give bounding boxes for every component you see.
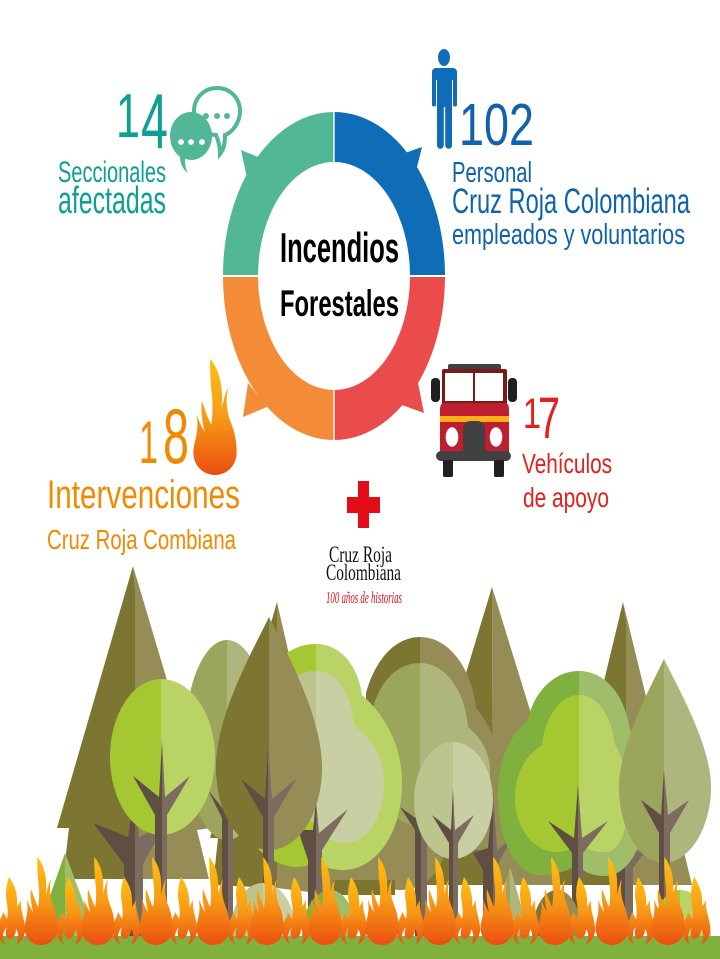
bush: bright green [652,890,711,936]
bush: pale [230,883,296,936]
tree: green ellipse left [110,679,215,835]
ring segment: orange [223,277,333,440]
number 14: 4 [141,77,168,165]
tree: rounded olive [185,640,269,840]
number 14 [116,77,168,165]
stat: 102 personal [452,92,690,251]
icon: chat bubbles [170,88,240,173]
icon: person [432,49,457,149]
ground [0,936,720,959]
label: Cruz Roja Combiana: Cruz Roja Combiana [47,524,236,555]
tree: rounded dark olive with lighter crown [366,637,500,850]
tree: large conifer left [57,566,211,879]
ring segment: blue [335,112,445,275]
label: Intervenciones: Intervenciones [47,473,240,517]
label: afectadas: afectadas [58,180,166,222]
logo text line 2: Colombiana [326,560,401,585]
title: Incendios: Incendios [280,224,399,271]
trunk: bright green tree [298,800,348,936]
stat: 18 intervenciones [47,392,240,555]
trunk: teardrop right [641,770,689,936]
label: Personal: Personal [452,157,532,189]
forest illustration [0,566,720,959]
trunk: large teardrop [241,747,296,936]
tree: green cloud right [498,671,648,876]
trunk: centre conifer [473,790,512,936]
ring segment: red [335,277,445,440]
ring segment: teal [223,112,333,275]
number 17: 1 [523,390,541,438]
icon: fire truck [431,364,517,477]
logo tagline: 100 años de historias [326,588,402,607]
number 102: 102 [459,92,534,158]
number 14: 1 [116,82,140,151]
number 17 [523,386,560,451]
number 17: 7 [538,386,560,451]
logo text line 1: Cruz Roja [329,542,392,567]
tree: large teardrop [216,617,322,850]
stat: 14 seccionales afectadas [58,77,168,222]
trunk: dark olive tree [400,807,427,936]
title: Forestales: Forestales [280,283,399,324]
tree: back conifer centre [355,587,584,890]
tree: small conifer behind [210,602,395,895]
stat: 17 vehiculos [522,386,612,513]
trunk: large conifer [93,790,165,936]
trunk: green cloud right [548,784,608,936]
small conifer front right [490,867,530,936]
label: Seccionales: Seccionales [58,156,166,189]
small conifer front left [36,853,96,936]
trunk: green ellipse left [133,740,190,936]
number 18 [139,392,189,480]
bush: green [302,890,356,936]
label: de apoyo: de apoyo [523,482,609,513]
tree: pale ellipse [414,742,493,859]
trunk: pale ellipse [432,788,474,936]
number 18: 8 [163,392,189,480]
icon: red cross [347,481,380,528]
trunk: rounded olive [208,790,233,936]
flames row [0,857,710,945]
tree: bright green cloud [234,644,402,870]
central ring diagram [223,112,445,440]
tree: teardrop right [619,659,711,863]
label: Vehiculos: Vehículos [522,448,612,479]
trunk: behind green cloud [617,850,645,936]
bush: olive [532,890,582,936]
icon: flame [193,359,237,475]
tree: back conifer right [555,602,692,885]
number 18: 1 [139,409,158,476]
logo: Cruz Roja Colombiana [326,481,402,607]
